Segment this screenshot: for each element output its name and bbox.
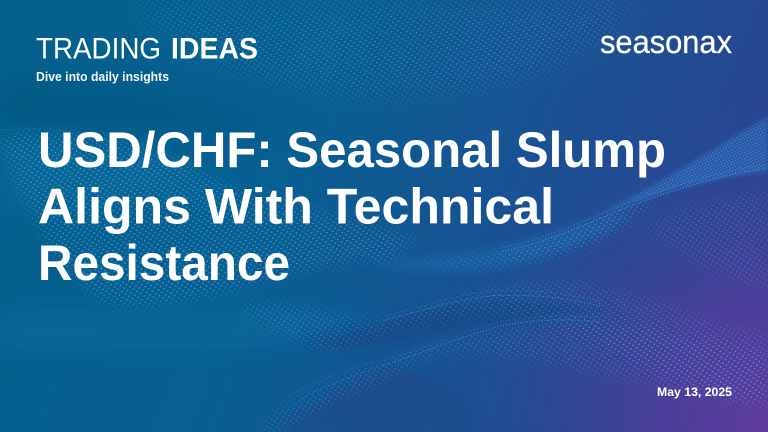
title: Resistance — [38, 235, 290, 291]
date: May 13, 2025 — [657, 385, 732, 399]
header: trading ideas — [36, 32, 258, 66]
bright wave edges — [0, 129, 768, 400]
title: USD/CHF: Seasonal Slump — [38, 122, 666, 178]
header: trading ideas: IDEAS — [171, 32, 258, 66]
title — [38, 122, 666, 291]
logo: seasonax: seasonax — [600, 24, 732, 60]
tagline: Dive into daily insights — [36, 70, 169, 84]
title: Aligns With Technical — [38, 178, 554, 234]
header: trading ideas: TRADING — [36, 32, 161, 66]
